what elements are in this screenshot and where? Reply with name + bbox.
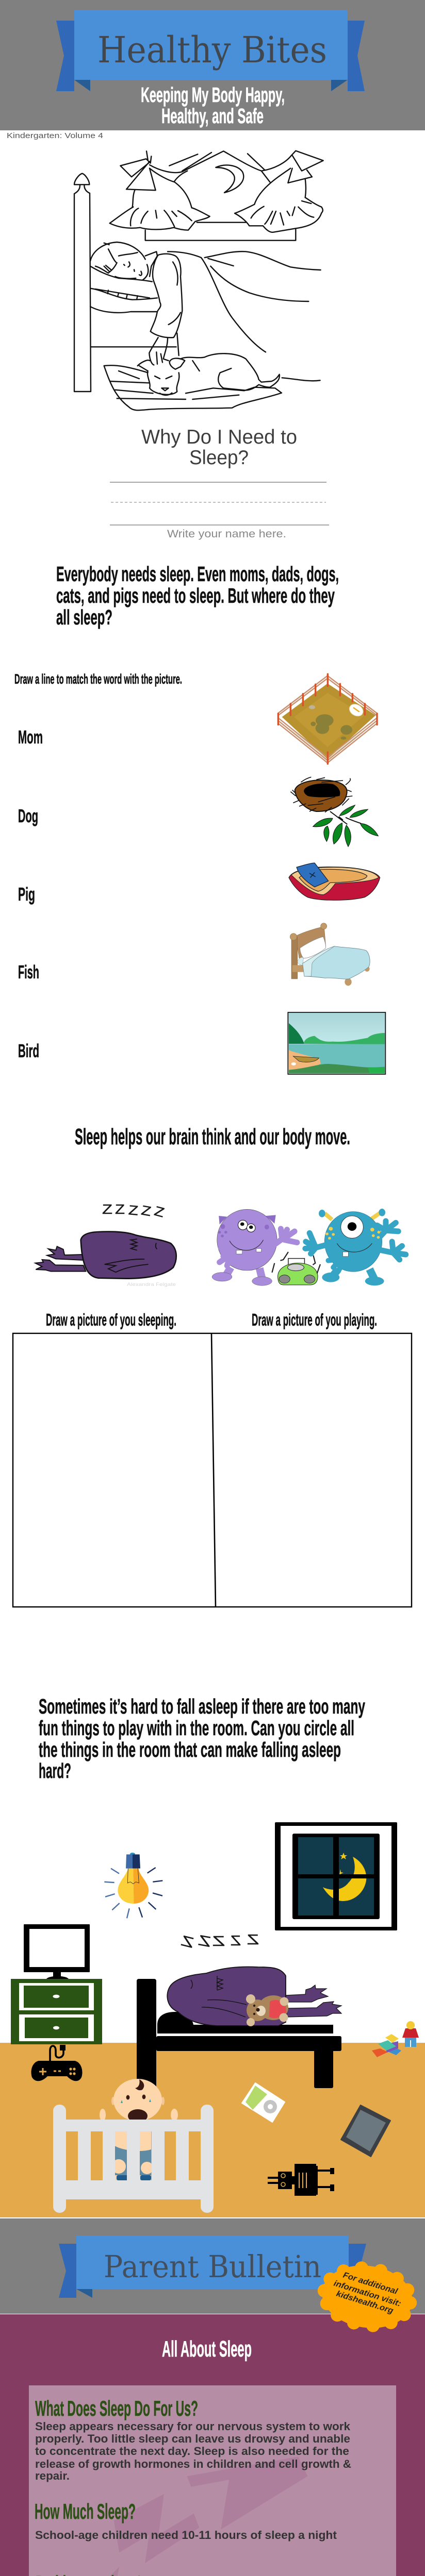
panel: sleep facts [29, 2385, 396, 2576]
instruction paragraph: circle the things: hard? [39, 1759, 71, 1783]
badge: additional information: information visit: [333, 2279, 402, 2309]
watermark z shapes [93, 2456, 307, 2576]
subtitle: Healthy, and Safe [161, 104, 264, 128]
bed z letters: Z [179, 1933, 195, 1951]
picture: dog bed [289, 863, 380, 900]
toy blocks and figure [372, 2021, 419, 2057]
matching words: Pig [18, 884, 35, 905]
section: what does sleep do: release of growth hormones in children and cell growth & [35, 2458, 351, 2470]
artist credit: Alexandra Felgate [127, 1282, 176, 1287]
dresser [11, 1979, 102, 2044]
matching words [18, 726, 43, 1061]
matching words: Bird [18, 1040, 39, 1061]
instruction paragraph: circle the things [39, 1694, 365, 1783]
matching instruction: Draw a line to match the word with the picture. [14, 671, 182, 687]
crying baby in crib [53, 2079, 214, 2213]
picture: lake [288, 1012, 385, 1074]
sleeping z letters: Z [102, 1201, 112, 1217]
section: how much sleep: School-age children need 10-11 hours of sleep a night [35, 2529, 337, 2541]
drawing prompts: Draw a picture of you sleeping. [46, 1310, 176, 1329]
panel: purple background [0, 2314, 425, 2576]
sleeping z letters [102, 1201, 166, 1221]
minifigure [402, 2021, 419, 2047]
illustration: sleeping monster [35, 1201, 176, 1287]
bed z letters: Z [231, 1933, 241, 1948]
section: what does sleep do: repair. [35, 2469, 70, 2482]
crib [53, 2105, 214, 2213]
volume label: Kindergarten: Volume 4 [7, 131, 103, 140]
worksheet title [141, 426, 297, 469]
subtitle [141, 83, 285, 128]
worksheet title: Sleep? [189, 447, 249, 469]
sleeping z letters: Z [153, 1203, 166, 1221]
sleeping z letters: Z [128, 1202, 139, 1218]
name prompt: Write your name here. [167, 528, 286, 540]
bed z letters: Z [197, 1932, 212, 1950]
picture: pig pen [277, 674, 378, 764]
worksheet title: Why Do I Need to [141, 426, 297, 448]
bulletin heading: All About Sleep [162, 2336, 252, 2362]
teddy bear [246, 1994, 289, 2026]
ribbon banner [59, 2235, 366, 2298]
toy robot [268, 2164, 334, 2196]
badge: additional information: kidshealth.org [335, 2290, 395, 2315]
parent bulletin header band [0, 2218, 425, 2314]
icon: light bulb [104, 1853, 162, 1918]
bulletin title: Parent Bulletin [104, 2249, 321, 2284]
matching words: Fish [18, 961, 39, 982]
sleeping z letters: Z [140, 1202, 153, 1219]
badge: additional information: For additional [342, 2271, 399, 2296]
sleeping z letters: Z [115, 1201, 125, 1217]
subtitle: Keeping My Body Happy, [141, 83, 285, 107]
section: how much sleep: How Much Sleep? [35, 2499, 136, 2523]
tablet [341, 2105, 390, 2157]
picture: bird nest [290, 777, 378, 846]
badge: additional information [313, 2256, 421, 2337]
bed z letters: Z [247, 1931, 259, 1947]
window with moon [275, 1822, 397, 1930]
section: what does sleep do: properly. Too little sleep can leave us drowsy and unable [35, 2432, 350, 2445]
drawing boxes [13, 1333, 412, 1607]
radio [272, 1252, 320, 1285]
game controller [31, 2045, 82, 2081]
bed z letters [179, 1931, 259, 1951]
illustration: playing monsters with radio [212, 1209, 406, 1285]
section: what does sleep do [35, 2396, 351, 2482]
title: Healthy Bites [97, 29, 327, 71]
music player [242, 2083, 285, 2122]
floor [0, 2043, 425, 2217]
matching words: Dog [18, 805, 38, 826]
moon and stars [323, 1853, 366, 1901]
section: how much sleep [35, 2499, 337, 2541]
header band: Healthy Bites [0, 0, 425, 130]
ribbon banner [56, 10, 365, 91]
illustration: child sleeping in bed with dog [74, 151, 323, 410]
bed [137, 1979, 341, 2088]
section: what does sleep do: to concentrate the next day. Sleep is also needed for the [35, 2445, 349, 2458]
matching words: Mom [18, 726, 43, 748]
blue monster [305, 1209, 406, 1285]
picture: bed [290, 923, 370, 986]
section: what does sleep do: What Does Sleep Do For Us? [35, 2396, 198, 2420]
intro paragraph [56, 562, 339, 629]
bed z letters: Z [213, 1933, 225, 1949]
name writing lines [110, 482, 329, 525]
purple monster [212, 1209, 297, 1285]
intro paragraph: all sleep? [56, 605, 112, 629]
section: what does sleep do: Sleep appears necessary for our nervous system to work [35, 2420, 351, 2433]
sleeping monster on bed [167, 1967, 341, 2026]
monitor on dresser [24, 1924, 90, 1979]
